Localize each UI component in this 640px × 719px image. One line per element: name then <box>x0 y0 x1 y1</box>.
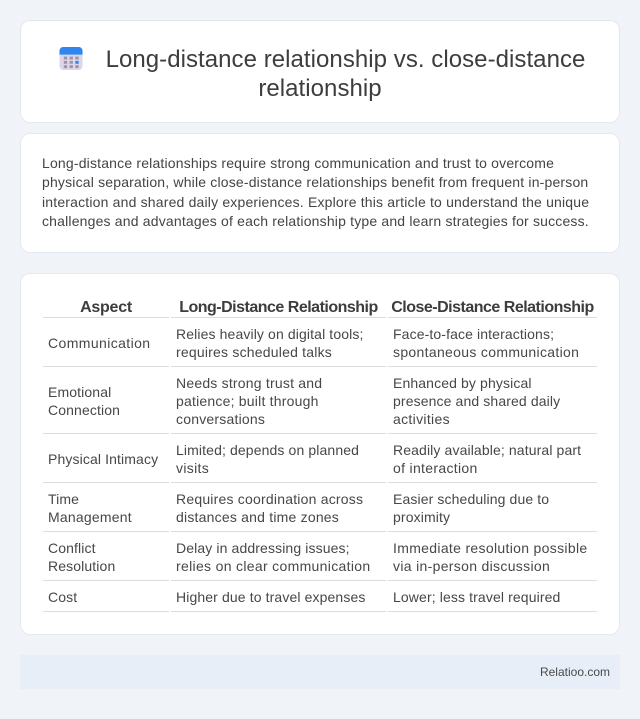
row: Emotional Connection <box>48 384 120 418</box>
cell: time, long-distance: distances and time zones <box>176 509 339 525</box>
cell: time, long-distance <box>176 491 363 525</box>
cell: intimacy, close-distance: of interaction <box>393 460 478 476</box>
cell: time, close-distance: Easier scheduling due to <box>393 491 549 507</box>
footer bar <box>20 655 620 689</box>
row: Time Management <box>48 491 132 525</box>
title: Long-distance relationship vs. close-distance <box>106 46 585 73</box>
cell: conflict, close-distance: Immediate resolution possible <box>393 540 588 556</box>
cell: conflict, long-distance: relies on clear communication <box>176 558 370 574</box>
cell: time, close-distance <box>393 491 549 525</box>
table heading: Aspect: Aspect <box>80 299 132 316</box>
row: Cost: Cost <box>48 589 77 605</box>
row: Conflict Resolution: Resolution <box>48 558 115 574</box>
cell: cost, close-distance: Lower; less travel required <box>393 589 560 605</box>
cell: emotional, close-distance: Enhanced by physical <box>393 375 532 391</box>
cell: communication, long-distance: Relies heavily on digital tools; <box>176 326 364 342</box>
table heading: Long-Distance Relationship: Long-Distance Relationship <box>179 299 378 316</box>
row: Time Management: Time <box>48 491 79 507</box>
cell: emotional, close-distance: presence and shared daily <box>393 393 560 409</box>
cell: communication, close-distance: spontaneous communication <box>393 344 579 360</box>
cell: emotional, close-distance: activities <box>393 411 450 427</box>
text block: intro <box>42 155 589 229</box>
cell: communication, close-distance <box>393 326 579 360</box>
title: relationship <box>258 75 382 102</box>
panel: comparison table <box>20 273 620 635</box>
cell: emotional, long-distance: conversations <box>176 411 265 427</box>
cell: time, long-distance: Requires coordination across <box>176 491 363 507</box>
cell: emotional, close-distance <box>393 375 560 427</box>
cell: conflict, long-distance <box>176 540 370 574</box>
cell: intimacy, close-distance: Readily available; natural part <box>393 442 581 458</box>
cell: communication, close-distance: Face-to-face interactions; <box>393 326 554 342</box>
cell: communication, long-distance: requires scheduled talks <box>176 344 332 360</box>
cell: conflict, close-distance: via in-person discussion <box>393 558 550 574</box>
row: Physical Intimacy: Physical Intimacy <box>48 451 158 467</box>
title <box>106 46 585 102</box>
row: Communication: Communication <box>48 335 150 351</box>
text block: intro: physical separation, while close-distance relationships benefit from frequent in-person <box>42 174 588 190</box>
text block: intro: challenges and advantages of each relationship type and learn strategies for success. <box>42 213 589 229</box>
cell: intimacy, long-distance <box>176 442 359 476</box>
cell: time, close-distance: proximity <box>393 509 450 525</box>
text block: intro: interaction and shared daily experiences. Explore this article to understand the unique <box>42 194 589 210</box>
table heading: Close-Distance Relationship: Close-Distance Relationship <box>391 299 594 316</box>
icon: calendar <box>59 47 83 70</box>
footer text: Relatioo.com: Relatioo.com <box>540 665 610 679</box>
cell: emotional, long-distance: Needs strong trust and <box>176 375 322 391</box>
panel: title header <box>20 20 620 123</box>
row: Conflict Resolution <box>48 540 115 574</box>
cell: intimacy, long-distance: visits <box>176 460 209 476</box>
cell: conflict, long-distance: Delay in addressing issues; <box>176 540 350 556</box>
panel: description <box>20 133 620 253</box>
cell: cost, long-distance: Higher due to travel expenses <box>176 589 365 605</box>
cell: intimacy, long-distance: Limited; depends on planned <box>176 442 359 458</box>
cell: communication, long-distance <box>176 326 364 360</box>
cell: emotional, long-distance <box>176 375 322 427</box>
cell: conflict, close-distance <box>393 540 588 574</box>
row: Time Management: Management <box>48 509 132 525</box>
cell: emotional, long-distance: patience; built through <box>176 393 319 409</box>
row: Emotional Connection: Connection <box>48 402 120 418</box>
cell: intimacy, close-distance <box>393 442 581 476</box>
row: Emotional Connection: Emotional <box>48 384 111 400</box>
row: Conflict Resolution: Conflict <box>48 540 96 556</box>
text block: intro: Long-distance relationships require strong communication and trust to overcome <box>42 155 554 171</box>
